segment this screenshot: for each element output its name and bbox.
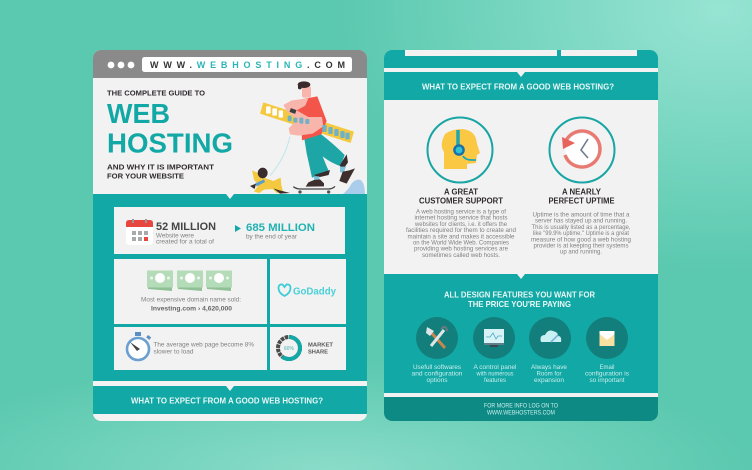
- title block: WEB: [107, 98, 170, 129]
- card: domain name: [114, 259, 267, 324]
- title block: FOR YOUR WEBSITE: [107, 174, 184, 180]
- text: customer support body: websites for clients, i.e. it offers the: [414, 222, 508, 228]
- card: market share donut: SHARE: [308, 350, 328, 356]
- card: websites created: 685 MILLION: [246, 222, 315, 234]
- text: feature labels: Room for: [536, 372, 562, 378]
- icon: cloud: [529, 317, 571, 359]
- text: uptime body: up and running.: [560, 250, 602, 256]
- banner: what to expect: WHAT TO EXPECT FROM A GOOD WEB HOSTING?: [131, 396, 323, 406]
- icon: customer support headset: [428, 118, 492, 182]
- icon: stopwatch: [127, 332, 151, 360]
- text: customer support body: [406, 210, 516, 259]
- heading: a nearly perfect uptime: PERFECT UPTIME: [548, 196, 614, 206]
- card: domain name: Investing.com › 4,620,000: [151, 306, 233, 312]
- card: websites created: by the end of year: [246, 234, 297, 240]
- text: feature labels: configuration is: [585, 372, 629, 378]
- card: websites created: 52 MILLION: [156, 221, 216, 233]
- text: uptime body: server has stayed up and running.: [535, 219, 627, 225]
- top teal strip with card remnants: [384, 50, 658, 68]
- heading: a nearly perfect uptime: A NEARLY: [562, 188, 602, 196]
- text: uptime body: This is usually listed as a percentage,: [532, 225, 631, 231]
- text: feature labels: [412, 365, 629, 384]
- text: uptime body: [531, 212, 631, 256]
- banner: what to expect: [384, 72, 658, 100]
- heading: a nearly perfect uptime: [549, 188, 614, 204]
- card: page speed: slower to load: [154, 350, 194, 356]
- browser bar: WWW. WEBHOSTING .COM: [150, 60, 345, 70]
- heading: all design features: THE PRICE YOU'RE PAYING: [468, 299, 571, 309]
- card: page speed: [114, 327, 267, 370]
- text: feature labels: so important: [590, 378, 625, 384]
- text: feature labels: and configuration: [412, 372, 462, 378]
- footer: WWW.WEBHOSTERS.COM: [487, 410, 555, 416]
- icon: banknotes: [147, 270, 232, 291]
- text: feature labels: Usefull softwares: [413, 365, 461, 371]
- text: uptime body: Uptime is the amount of time that a: [532, 212, 630, 218]
- text: feature labels: A control panel: [474, 365, 516, 371]
- banner: what to expect: WHAT TO EXPECT FROM A GOOD WEB HOSTING?: [422, 82, 614, 92]
- title block: THE COMPLETE GUIDE TO: [107, 90, 206, 98]
- text: feature labels: with numerous: [476, 372, 514, 378]
- title block: HOSTING: [107, 128, 233, 158]
- title block: [107, 90, 233, 180]
- illustration: man on skateboard walking dog: [250, 81, 365, 195]
- text: feature labels: expansion: [534, 378, 564, 384]
- heading: all design features: [444, 292, 595, 307]
- text: customer support body: providing web hosting services are: [414, 247, 509, 253]
- browser bar: [93, 50, 367, 78]
- card: market share donut: [270, 327, 346, 370]
- card: websites created: created for a total of: [156, 240, 214, 246]
- heading: a great customer support: CUSTOMER SUPPORT: [419, 196, 503, 206]
- footer: [384, 397, 658, 421]
- text: uptime body: provider is at keeping their systems: [534, 244, 628, 250]
- title block: AND WHY IT IS IMPORTANT: [107, 164, 215, 172]
- icon: calendar: [126, 219, 153, 245]
- banner: what to expect: [93, 386, 367, 414]
- panel: right page: [384, 50, 658, 421]
- card: websites created: [114, 207, 345, 254]
- heading: a great customer support: [419, 188, 503, 204]
- panel: left page: [93, 50, 367, 421]
- icon: email envelope: [586, 317, 628, 359]
- card: GoDaddy logo: [270, 259, 346, 324]
- footer: FOR MORE INFO LOG ON TO: [484, 404, 558, 410]
- heading: a great customer support: A GREAT: [444, 188, 478, 196]
- icon: tools: [416, 317, 458, 359]
- text: feature labels: Email: [600, 365, 614, 371]
- text: customer support body: internet hosting service that hosts: [414, 216, 508, 222]
- text: feature labels: features: [484, 378, 506, 384]
- icon: control panel monitor: [473, 317, 515, 359]
- heading: all design features: ALL DESIGN FEATURES YOU WANT FOR: [444, 290, 595, 300]
- text: uptime body: measure of how good a web hosting: [531, 237, 631, 243]
- text: customer support body: A web hosting service is a type of: [416, 210, 506, 216]
- text: customer support body: facilities required for them to create and: [406, 228, 516, 234]
- card: market share donut: MARKET: [308, 342, 333, 348]
- card: domain name: Most expensive domain name sold:: [141, 298, 241, 304]
- panel: design features: [384, 274, 658, 393]
- text: customer support body: maintain a site and makes it accessible: [408, 234, 515, 240]
- card: page speed: The average web page become 8%: [154, 342, 255, 348]
- card: market share donut: 60%: [284, 346, 295, 352]
- icon: uptime clock: [550, 118, 614, 182]
- text: feature labels: Always have: [531, 365, 568, 371]
- text: customer support body: on the World Wide Web. Companies: [413, 240, 509, 246]
- text: feature labels: options: [426, 378, 448, 384]
- text: customer support body: sometimes called web hosts.: [422, 253, 500, 259]
- card: websites created: Website were: [156, 234, 195, 240]
- card: GoDaddy logo: GoDaddy: [293, 286, 336, 298]
- panel: teal stats section: [93, 194, 367, 381]
- text: uptime body: like "99.9% uptime." Uptime is a great: [533, 231, 629, 237]
